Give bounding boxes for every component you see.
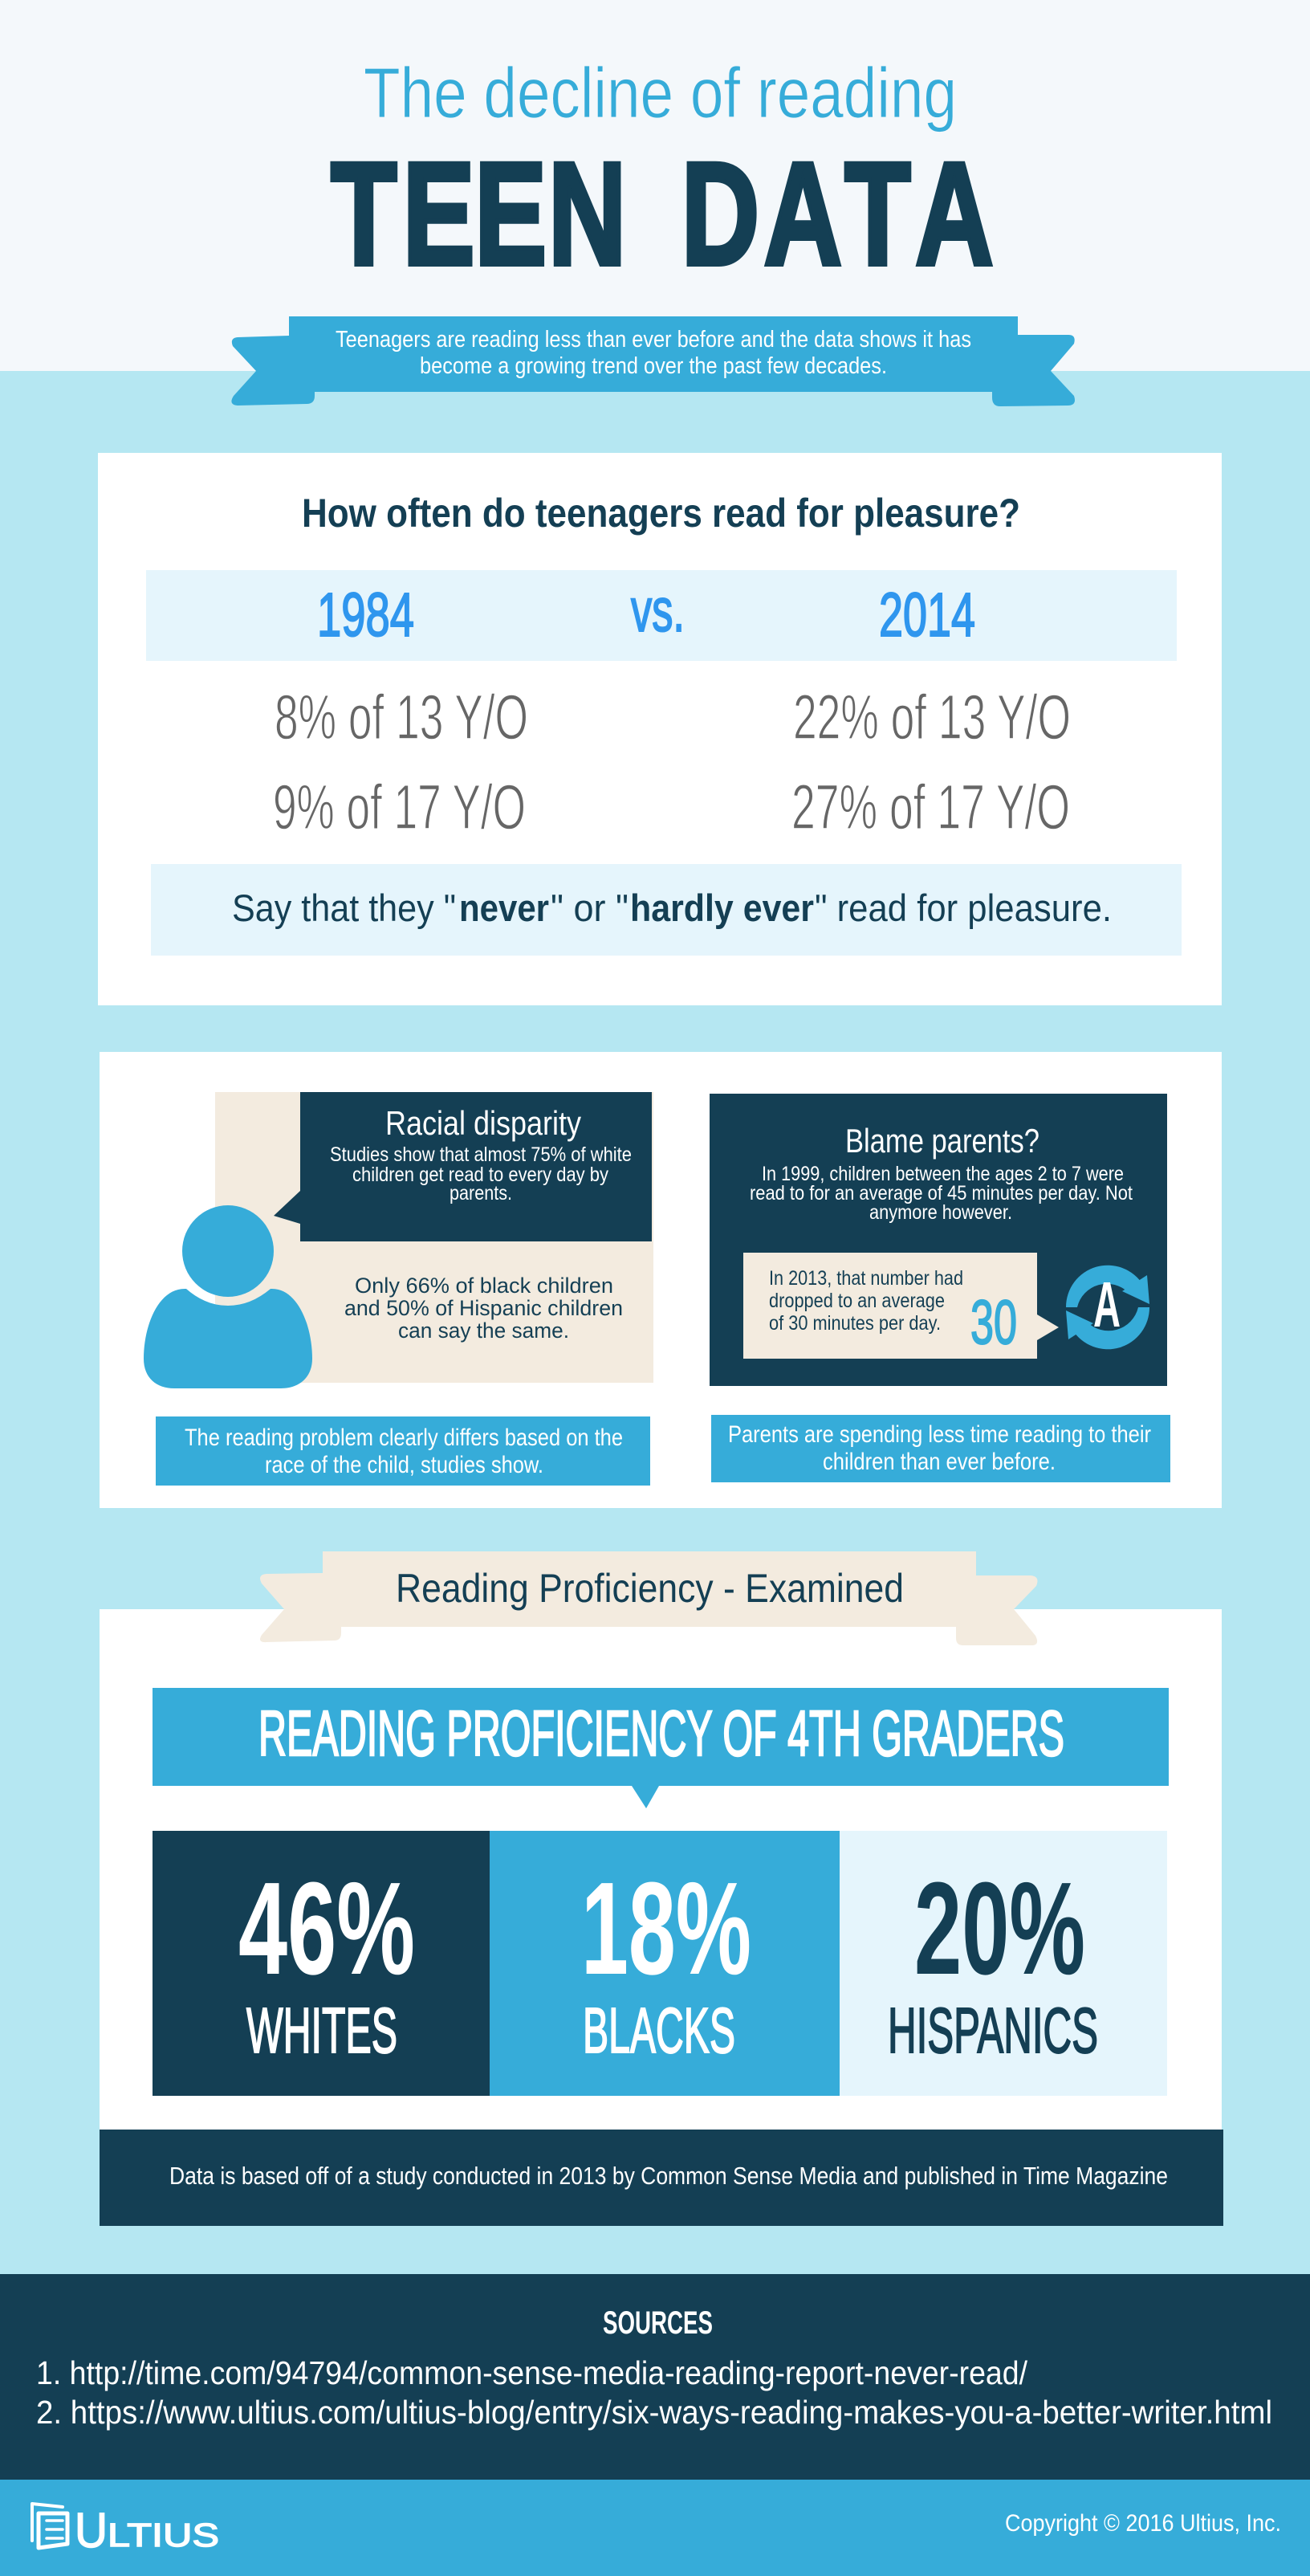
sources panel bbox=[0, 2274, 1310, 2480]
blame parents card: Blame parents? bbox=[845, 1122, 1039, 1160]
stat card: whites: WHITES bbox=[246, 1995, 397, 2066]
stat card: blacks bbox=[490, 1831, 840, 2096]
2014 statistics bbox=[791, 681, 1071, 842]
year comparison strip bbox=[146, 570, 1177, 661]
2014 statistics: 22% of 13 Y/O bbox=[793, 681, 1071, 752]
blame parents card: read to for an average of 45 minutes per day. Not bbox=[750, 1182, 1133, 1204]
title: script line: The decline of reading bbox=[364, 53, 957, 132]
blame parents card: In 1999, children between the ages 2 to 7 were bbox=[762, 1163, 1124, 1185]
parents caption: children than ever before. bbox=[823, 1449, 1056, 1475]
racial disparity caption: The reading problem clearly differs based on the bbox=[185, 1425, 623, 1451]
year comparison strip: 2014 bbox=[879, 581, 975, 650]
conclusion strip: Say that they " bbox=[232, 887, 456, 929]
logo: Ultius: U bbox=[75, 2503, 108, 2558]
speech bubble bbox=[274, 1092, 652, 1241]
logo: Ultius bbox=[32, 2503, 219, 2558]
conclusion strip bbox=[151, 864, 1182, 956]
blame parents card bbox=[710, 1094, 1167, 1386]
year comparison strip: 1984 bbox=[317, 581, 414, 650]
conclusion strip: never bbox=[459, 887, 549, 929]
source list: 1. http://time.com/94794/common-sense-media-reading-report-never-read/ bbox=[36, 2354, 1028, 2391]
blame parents card: anymore however. bbox=[869, 1201, 1012, 1224]
racial disparity caption bbox=[156, 1416, 650, 1486]
racial disparity caption: race of the child, studies show. bbox=[265, 1452, 543, 1478]
section ribbon heading bbox=[260, 1551, 1037, 1645]
2014 statistics: 27% of 17 Y/O bbox=[791, 771, 1070, 842]
stat card: blacks: BLACKS bbox=[583, 1995, 735, 2066]
1984 statistics: 9% of 17 Y/O bbox=[273, 771, 526, 842]
30 minutes callout: In 2013, that number had bbox=[769, 1267, 963, 1290]
icon: person bbox=[144, 1205, 312, 1388]
speech bubble: children get read to every day by bbox=[352, 1164, 608, 1186]
sources heading: SOURCES bbox=[603, 2305, 713, 2341]
30 minutes callout: of 30 minutes per day. bbox=[769, 1312, 941, 1335]
speech bubble: Racial disparity bbox=[385, 1104, 581, 1142]
conclusion strip: " or " bbox=[551, 887, 629, 929]
beige statement text bbox=[344, 1274, 623, 1343]
parents caption: Parents are spending less time reading to their bbox=[728, 1421, 1151, 1448]
title: main heading: TEEN DATA bbox=[331, 132, 994, 296]
source list bbox=[36, 2354, 1272, 2431]
parents caption bbox=[711, 1415, 1170, 1482]
beige statement text: can say the same. bbox=[398, 1319, 569, 1343]
section ribbon heading: Reading Proficiency - Examined bbox=[396, 1566, 904, 1611]
panel: reading proficiency bbox=[100, 1551, 1223, 2226]
speech bubble: Studies show that almost 75% of white bbox=[330, 1143, 632, 1166]
stat card: whites bbox=[153, 1831, 490, 2096]
30 minutes callout: dropped to an average bbox=[769, 1290, 945, 1312]
icon: cycle arrows with letter A: A bbox=[1093, 1269, 1121, 1340]
panel: how often teenagers read bbox=[98, 453, 1222, 1005]
panel heading: How often do teenagers read for pleasure? bbox=[302, 491, 1020, 536]
title bbox=[331, 53, 994, 296]
copyright: Copyright © 2016 Ultius, Inc. bbox=[1005, 2510, 1281, 2537]
footer bar bbox=[0, 2480, 1310, 2576]
1984 statistics bbox=[273, 681, 528, 842]
icon: cycle arrows with letter A bbox=[1066, 1266, 1149, 1349]
racial disparity card bbox=[144, 1092, 653, 1388]
intro ribbon banner: Teenagers are reading less than ever before and the data shows it has bbox=[336, 327, 971, 353]
conclusion strip: " read for pleasure. bbox=[815, 887, 1112, 929]
study note bar bbox=[100, 2130, 1223, 2226]
beige statement text: and 50% of Hispanic children bbox=[344, 1296, 623, 1320]
30 minutes callout bbox=[743, 1253, 1059, 1359]
1984 statistics: 8% of 13 Y/O bbox=[275, 681, 528, 752]
30 minutes callout: 30 bbox=[970, 1286, 1017, 1357]
stat card: hispanics bbox=[840, 1831, 1167, 2096]
beige statement text: Only 66% of black children bbox=[355, 1274, 613, 1298]
study note bar: Data is based off of a study conducted in 2013 by Common Sense Media and published in Time Magazine bbox=[169, 2162, 1168, 2190]
stat card: hispanics: HISPANICS bbox=[888, 1995, 1098, 2066]
intro ribbon banner: become a growing trend over the past few decades. bbox=[420, 353, 887, 379]
stat card: whites: 46% bbox=[238, 1855, 415, 2002]
panel: racial disparity and parents bbox=[100, 1052, 1222, 1508]
speech bubble: parents. bbox=[450, 1182, 512, 1204]
logo: Ultius: LTIUS bbox=[108, 2517, 219, 2554]
intro ribbon banner bbox=[231, 316, 1075, 406]
stat card: hispanics: 20% bbox=[914, 1855, 1085, 2002]
year comparison strip: vs. bbox=[631, 577, 685, 645]
stat card: blacks: 18% bbox=[581, 1855, 751, 2002]
proficiency heading bar with pointer bbox=[153, 1688, 1169, 1808]
conclusion strip: hardly ever bbox=[630, 887, 814, 929]
